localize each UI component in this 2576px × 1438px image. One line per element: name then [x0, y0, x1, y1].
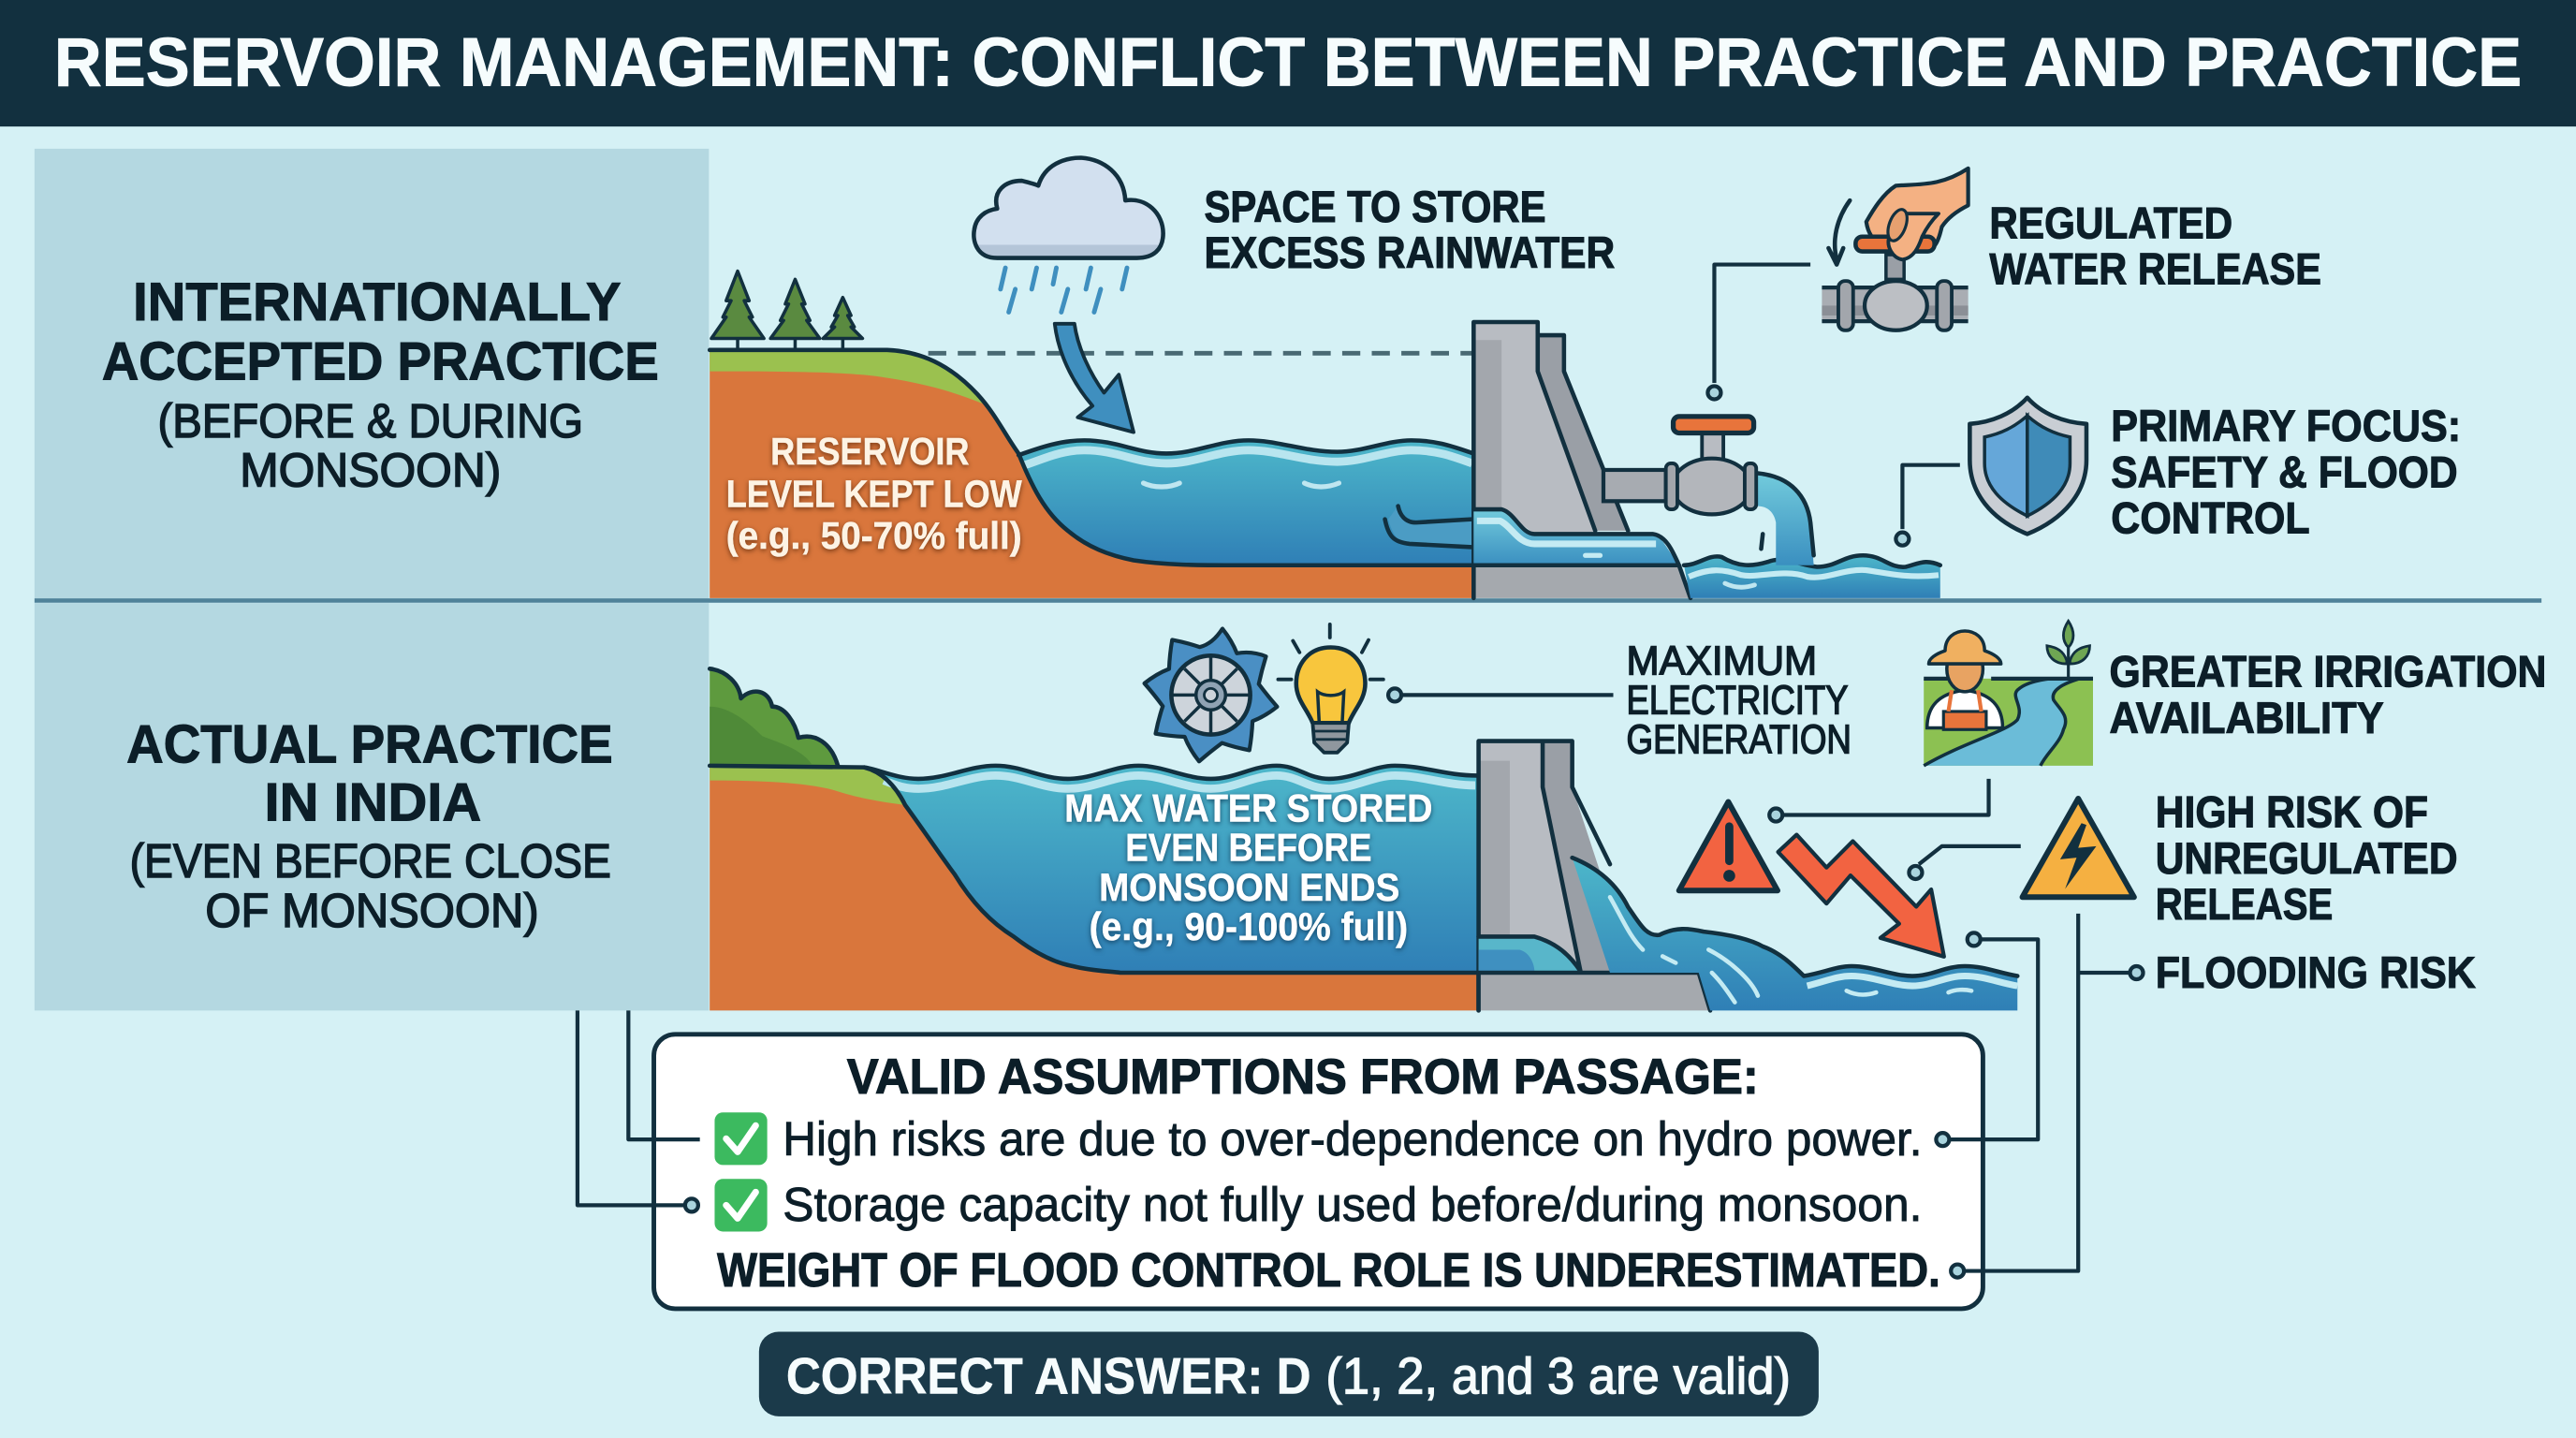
panel: actual practice in India [35, 603, 709, 1010]
spillway and tail water [1573, 858, 2017, 1010]
label: maximum electricity generation: ELECTRICITY [1627, 678, 1848, 724]
connector: panel to second assumption [578, 1010, 698, 1211]
reservoir label [726, 430, 1022, 557]
icon: check one [714, 1112, 768, 1165]
label: primary focus [2111, 402, 2461, 544]
icon: shield [1969, 398, 2086, 534]
arrow: rain into reservoir [1055, 324, 1134, 433]
icon: light bulb [1278, 624, 1383, 753]
label: primary focus: CONTROL [2111, 494, 2310, 544]
panel: internationally accepted practice: MONSOON) [240, 444, 501, 497]
label: maximum electricity generation [1627, 638, 1852, 763]
label: primary focus: PRIMARY FOCUS: [2111, 402, 2461, 451]
label: greater irrigation availability: AVAILABILITY [2110, 694, 2384, 743]
label: high risk of unregulated release [2156, 788, 2458, 930]
tail water [1684, 555, 1940, 598]
dam [1479, 741, 1710, 1010]
water label [1064, 786, 1432, 948]
icon: rain cloud [973, 157, 1164, 312]
dam [1473, 322, 1690, 598]
panel: actual practice in India: IN INDIA [265, 773, 481, 833]
panel: actual practice in India: (EVEN BEFORE CLOSE [130, 834, 611, 888]
label: high risk of unregulated release: RELEASE [2156, 880, 2333, 930]
icon: red warning triangle [1679, 801, 1778, 890]
panel: internationally accepted practice [35, 149, 709, 599]
land outline [710, 350, 1679, 565]
arrow: zigzag falling risk [1778, 835, 1944, 957]
valve with outflow [1603, 417, 1814, 565]
water body [1018, 440, 1473, 565]
icon: hand turning valve [1822, 169, 1969, 330]
panel: internationally accepted practice: INTERNATIONALLY [133, 272, 621, 332]
label: regulated water release: WATER RELEASE [1989, 245, 2321, 295]
panel: valid assumptions [654, 1034, 1983, 1309]
water label: MAX WATER STORED [1064, 786, 1432, 830]
label: greater irrigation availability [2110, 648, 2546, 743]
label: regulated water release: REGULATED [1989, 198, 2232, 248]
connector: valve to regulated release [1707, 265, 1810, 399]
label: space to store: EXCESS RAINWATER [1204, 228, 1615, 278]
icon: orange high voltage triangle [2023, 799, 2134, 897]
title banner [0, 0, 2576, 126]
icon: check two [714, 1179, 768, 1231]
label: high risk of unregulated release: HIGH RISK OF [2156, 788, 2428, 838]
label: high risk of unregulated release: UNREGULATED [2156, 834, 2458, 884]
panel: actual practice in India: OF MONSOON) [205, 884, 539, 937]
correct answer badge [759, 1332, 1819, 1416]
water label: EVEN BEFORE [1125, 826, 1372, 870]
connector: high risk to arrow [1909, 846, 2021, 879]
connector: shield to tail water [1895, 465, 1960, 546]
connector: flooding to first assumption [1936, 932, 2038, 1146]
title banner: RESERVOIR MANAGEMENT: CONFLICT BETWEEN PRACTICE AND PRACTICE [54, 22, 2522, 100]
label: maximum electricity generation: MAXIMUM [1627, 638, 1817, 683]
label: regulated water release [1989, 198, 2321, 295]
panel: internationally accepted practice: (BEFORE & DURING [157, 394, 583, 448]
dashed full level line [929, 352, 1472, 355]
icon: farmer and irrigation canal [1924, 621, 2093, 766]
correct answer badge: (1, 2, and 3 are valid) [1325, 1347, 1791, 1404]
lower scene: full reservoir and dam [710, 668, 2017, 1010]
trees [711, 271, 862, 350]
label: flooding risk: FLOODING RISK [2156, 948, 2476, 998]
label: maximum electricity generation: GENERATION [1627, 717, 1852, 763]
panel: internationally accepted practice: ACCEPTED PRACTICE [102, 331, 659, 391]
panel: actual practice in India: ACTUAL PRACTICE [126, 714, 613, 774]
label: primary focus: SAFETY & FLOOD [2111, 448, 2458, 497]
water label: (e.g., 90-100% full) [1090, 904, 1408, 948]
land with bush [710, 668, 1479, 1010]
heading: VALID ASSUMPTIONS FROM PASSAGE: [847, 1049, 1759, 1105]
full water body [710, 766, 1699, 973]
icon: turbine gear [1145, 629, 1277, 761]
connector: flood risk to third assumption [1951, 914, 2144, 1278]
assumption one: High risks are due to over-dependence on hydro power. [783, 1112, 1922, 1166]
connector: bulb to electricity label [1388, 688, 1614, 701]
connector: panel to first assumption [628, 1010, 700, 1139]
assumption two: Storage capacity not fully used before/during monsoon. [783, 1178, 1922, 1231]
upper scene: low reservoir and dam [710, 271, 1940, 598]
reservoir label: (e.g., 50-70% full) [726, 514, 1022, 557]
land with grass [710, 350, 1473, 598]
reservoir label: RESERVOIR [770, 430, 970, 473]
water label: MONSOON ENDS [1099, 865, 1399, 909]
reservoir label: LEVEL KEPT LOW [726, 472, 1022, 515]
outlet lines in water [1385, 506, 1473, 547]
label: space to store [1204, 183, 1615, 278]
label: space to store: SPACE TO STORE [1204, 183, 1546, 232]
connector: irrigation to warning [1769, 779, 1989, 822]
assumption three: WEIGHT OF FLOOD CONTROL ROLE IS UNDERESTIMATED. [717, 1243, 1940, 1297]
correct answer badge: CORRECT ANSWER: D [786, 1347, 1311, 1404]
